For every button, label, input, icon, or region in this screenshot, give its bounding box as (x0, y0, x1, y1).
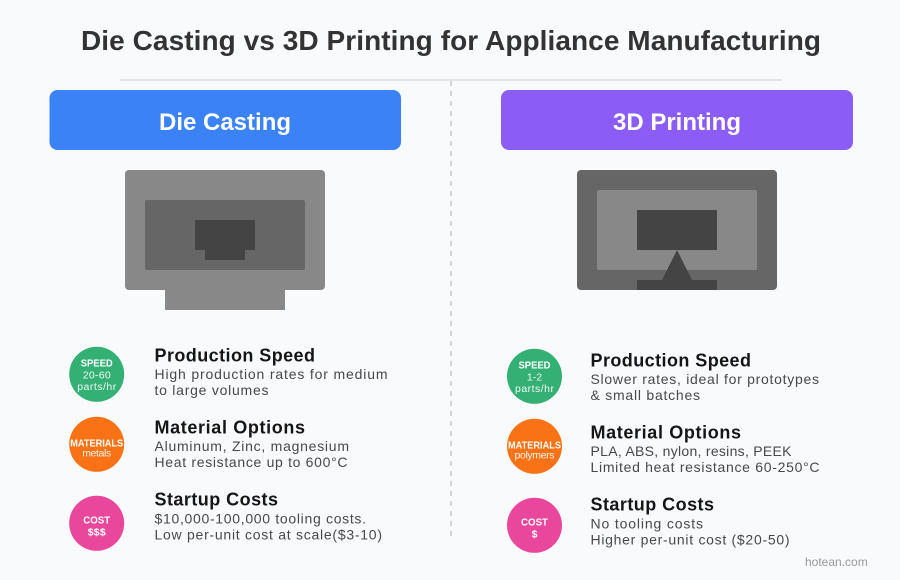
text: startup costs: No tooling costs (590, 515, 703, 531)
icon: cost badge (69, 496, 124, 551)
heading: 3d printing: 3D Printing (613, 109, 741, 136)
text: material options: Limited heat resistance 60-250°C (590, 459, 820, 475)
icon: speed badge: parts/hr (515, 383, 554, 395)
text: material options (590, 423, 820, 475)
text: startup costs: Startup Costs (154, 490, 278, 510)
icon: cost badge (507, 498, 562, 553)
icon: speed badge (69, 347, 124, 402)
text: production speed: Production Speed (154, 346, 315, 366)
icon: materials badge (507, 419, 562, 474)
icon: cost badge: COST (83, 514, 111, 526)
icon: materials badge: MATERIALS (508, 439, 561, 451)
row: material options (507, 419, 820, 475)
icon: speed badge: 20-60 (83, 370, 111, 382)
icon: materials badge: polymers (514, 449, 554, 461)
icon: speed badge (507, 349, 562, 404)
illustration: die casting machine (125, 170, 325, 310)
icon: speed badge: 1-2 (527, 372, 542, 384)
title: Die Casting vs 3D Printing for Appliance Manufacturing (81, 25, 821, 56)
text: production speed (154, 346, 388, 398)
text: startup costs (154, 490, 382, 542)
text: startup costs: Startup Costs (590, 495, 714, 515)
text: production speed: Production Speed (590, 351, 751, 371)
icon: speed badge: SPEED (518, 360, 551, 372)
heading: die casting (50, 90, 401, 150)
text: production speed: Slower rates, ideal for prototypes (590, 371, 819, 387)
heading: 3d printing (501, 90, 853, 150)
panel: 3d printing (501, 90, 853, 553)
row: material options (69, 417, 349, 472)
row: startup costs (69, 490, 382, 551)
text: startup costs (590, 495, 790, 547)
text: production speed: to large volumes (154, 382, 268, 398)
text: startup costs: $10,000-100,000 tooling costs. (154, 510, 366, 526)
text: material options: Material Options (590, 423, 741, 443)
icon: materials badge (69, 417, 124, 472)
icon: speed badge: parts/hr (77, 381, 117, 393)
text: material options: Material Options (154, 418, 305, 438)
text: material options: PLA, ABS, nylon, resins, PEEK (590, 443, 792, 459)
row: startup costs (507, 495, 790, 553)
row: production speed (507, 349, 819, 404)
text: material options: Heat resistance up to 600°C (154, 454, 348, 470)
watermark: hotean.com (805, 555, 868, 569)
icon: cost badge: $ (532, 528, 538, 540)
icon: speed badge: SPEED (81, 358, 113, 370)
text: material options: Aluminum, Zinc, magnesium (154, 438, 349, 454)
heading: die casting: Die Casting (159, 109, 291, 136)
illustration: 3d printer (577, 170, 777, 290)
panel: die casting (50, 90, 401, 551)
text: production speed: High production rates for medium (154, 366, 388, 382)
text: production speed: & small batches (590, 387, 700, 403)
icon: materials badge: metals (82, 447, 111, 459)
row: production speed (69, 346, 387, 402)
icon: cost badge: $$$ (88, 526, 106, 538)
text: startup costs: Low per-unit cost at scale($3-10) (154, 526, 382, 542)
icon: cost badge: COST (521, 516, 549, 528)
text: production speed (590, 351, 819, 403)
icon: materials badge: MATERIALS (70, 437, 123, 449)
text: material options (154, 418, 349, 470)
text: startup costs: Higher per-unit cost ($20-50) (590, 531, 790, 547)
